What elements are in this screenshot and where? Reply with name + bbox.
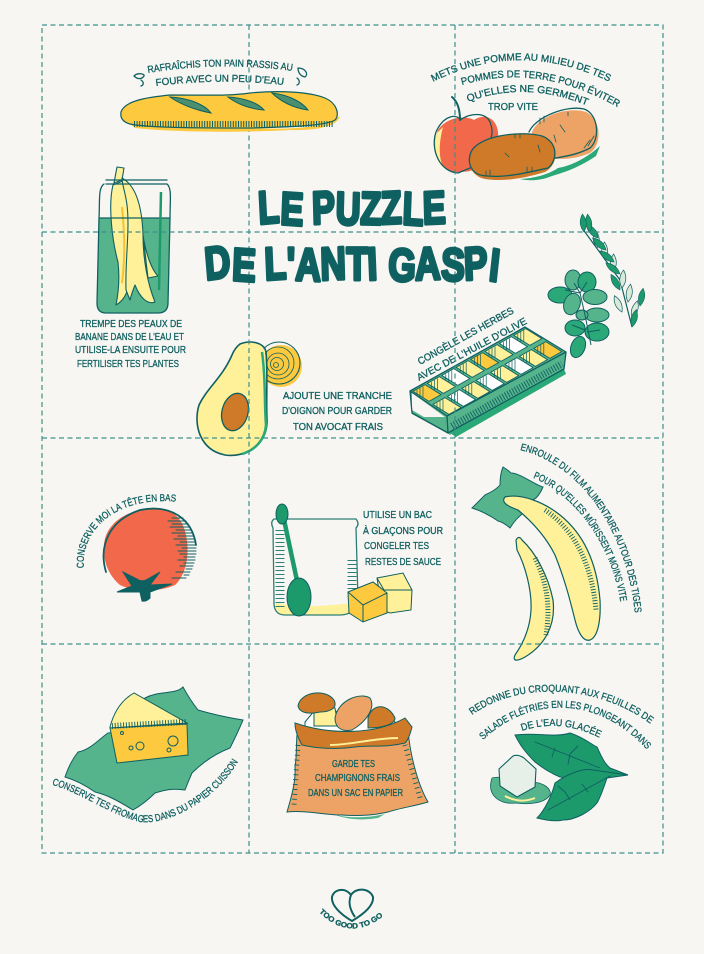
caption: apple and potatoes: QU'ELLES NE GERMENT: [466, 84, 590, 105]
tomato calyx: [117, 572, 172, 601]
peels: [111, 167, 158, 305]
caption: salad: DE L'EAU GLACÉE: [520, 718, 602, 738]
large banana ripple: [545, 510, 596, 610]
leaf bottom: [537, 770, 628, 821]
caption: apple and potatoes: [430, 53, 620, 113]
orange potato: [529, 108, 599, 160]
bag rim: [295, 718, 412, 748]
caption: baguette: FOUR AVEC UN PEU D'EAU: [156, 74, 284, 86]
parchment: [65, 687, 243, 810]
caption: cheese: CONSERVE TES FROMAGES DANS DU PAPIER CUISSON: [53, 758, 238, 822]
ice cube amber: [348, 582, 387, 622]
rim highlight: [330, 738, 398, 745]
jar with banana peels: [75, 167, 186, 370]
ice tray: [410, 304, 566, 437]
caption: apple and potatoes: METS UNE POMME AU MILIEU DE TES: [430, 53, 611, 82]
logo heart: [332, 890, 373, 921]
jar hatching: [280, 530, 352, 608]
mushrooms: [298, 693, 405, 735]
title: DE L'ANTI GASPI: [202, 236, 504, 291]
caption: mushrooms: [308, 759, 403, 799]
clover sprig: [548, 270, 609, 360]
caption: sauce: À GLAÇONS POUR: [363, 524, 443, 537]
tomato shading: [168, 518, 196, 578]
caption: avocado: D'OIGNON POUR GARDER: [282, 406, 392, 417]
tray outline: [410, 327, 566, 433]
sauce: [276, 603, 350, 615]
baguette shadow: [122, 116, 340, 132]
caption: banana peel: BANANE DANS DE L'EAU ET: [75, 332, 184, 343]
caption: mushrooms: CHAMPIGNONS FRAIS: [315, 773, 400, 784]
small banana ripple: [535, 558, 548, 635]
cheese top: [110, 693, 187, 728]
caption: avocado: [282, 391, 392, 433]
logo wordmark: TOO GOOD TO GO: [320, 908, 382, 929]
cheese holes: [120, 732, 178, 752]
caption: herbs: AVEC DE L'HUILE D'OLIVE: [415, 316, 529, 384]
caption: mushrooms: DANS UN SAC EN PAPIER: [308, 788, 403, 799]
caption: bananas: POUR QU'ELLES MÛRISSENT MOINS VITE: [534, 472, 628, 602]
caption: apple and potatoes: POMMES DE TERRE POUR ÉVITER: [460, 70, 620, 108]
brown potato: [469, 134, 556, 180]
large banana: [504, 496, 600, 640]
caption: banana peel: FERTILISER TES PLANTES: [77, 359, 179, 370]
bag shadow: [335, 814, 385, 819]
apple: [434, 97, 498, 173]
droplets: [134, 68, 307, 86]
caption: baguette: [148, 59, 293, 86]
caption: mushrooms: GARDE TES: [332, 759, 375, 770]
caption: banana peel: TREMPE DES PEAUX DE: [80, 319, 182, 330]
puddle: [491, 777, 550, 804]
puzzle grid: [42, 25, 663, 853]
caption: apple and potatoes: TROP VITE: [488, 102, 538, 113]
crust: [121, 92, 337, 128]
jar outline: [97, 180, 170, 313]
tomato: [76, 494, 197, 602]
tomato body: [104, 508, 188, 590]
potato shadows: [520, 146, 600, 180]
mushroom bag: [287, 693, 428, 819]
puddle highlight: [505, 796, 535, 801]
caption: tomato: CONSERVE MOI LA TÊTE EN BAS: [76, 494, 176, 568]
cheese hatching: [112, 722, 186, 726]
bag body: [287, 730, 428, 816]
cheese on parchment: [53, 686, 244, 822]
spoon: [276, 504, 311, 616]
tray hatching: [452, 364, 562, 426]
leaf veins: [535, 742, 610, 810]
logo: [320, 888, 382, 929]
caption: sauce: [363, 510, 443, 568]
ice cube yellow: [377, 573, 412, 613]
caption: avocado: AJOUTE UNE TRANCHE: [283, 391, 392, 402]
tray cells: [413, 329, 562, 414]
herbs: [548, 214, 646, 360]
sauce jar and ice cubes: [272, 504, 443, 622]
tomato outline: [104, 509, 196, 572]
title: LE PUZZLE: [256, 181, 446, 235]
water: [97, 218, 170, 313]
caption: banana peel: UTILISE-LA ENSUITE POUR: [75, 345, 186, 356]
potatoes and apple: [434, 97, 600, 180]
caption: sauce: RESTES DE SAUCE: [365, 557, 441, 568]
bananas: [471, 443, 642, 661]
small banana: [514, 538, 553, 660]
title: [202, 181, 504, 291]
caption: herbs: CONGÈLE LES HERBES: [415, 304, 516, 368]
stalk in jar: [159, 192, 161, 290]
onion: [258, 342, 302, 387]
caption: salad: SALADE FLÉTRIES EN LES PLONGEANT DANS: [479, 700, 651, 749]
caption: avocado: TON AVOCAT FRAIS: [293, 422, 383, 433]
leaf top: [515, 733, 628, 778]
cheese face: [110, 724, 188, 763]
avocado and onion: [197, 341, 392, 455]
crust hatching: [134, 121, 334, 127]
bag hatching: [294, 745, 420, 805]
avocado pit: [218, 390, 252, 434]
caption: baguette: RAFRAÎCHIS TON PAIN RASSIS AU: [148, 59, 293, 73]
caption: sauce: UTILISE UN BAC: [363, 510, 432, 521]
caption: banana peel: [75, 319, 186, 370]
ice cube: [499, 755, 536, 797]
jar: [272, 519, 358, 615]
caption: salad: REDONNE DU CROQUANT AUX FEUILLES DE: [468, 684, 654, 724]
baguette: [120, 59, 340, 132]
salad and ice: [468, 684, 654, 822]
caption: bananas: ENROULE DU FILM ALIMENTAIRE AUTOUR DES TIGES: [520, 443, 642, 612]
tray body: [410, 327, 566, 435]
caption: salad: [468, 684, 654, 749]
plastic film: [472, 467, 543, 528]
caption: sauce: CONGELER TES: [364, 541, 429, 552]
avocado flesh: [197, 341, 268, 455]
slashes: [170, 93, 308, 113]
rosemary: [579, 214, 646, 328]
